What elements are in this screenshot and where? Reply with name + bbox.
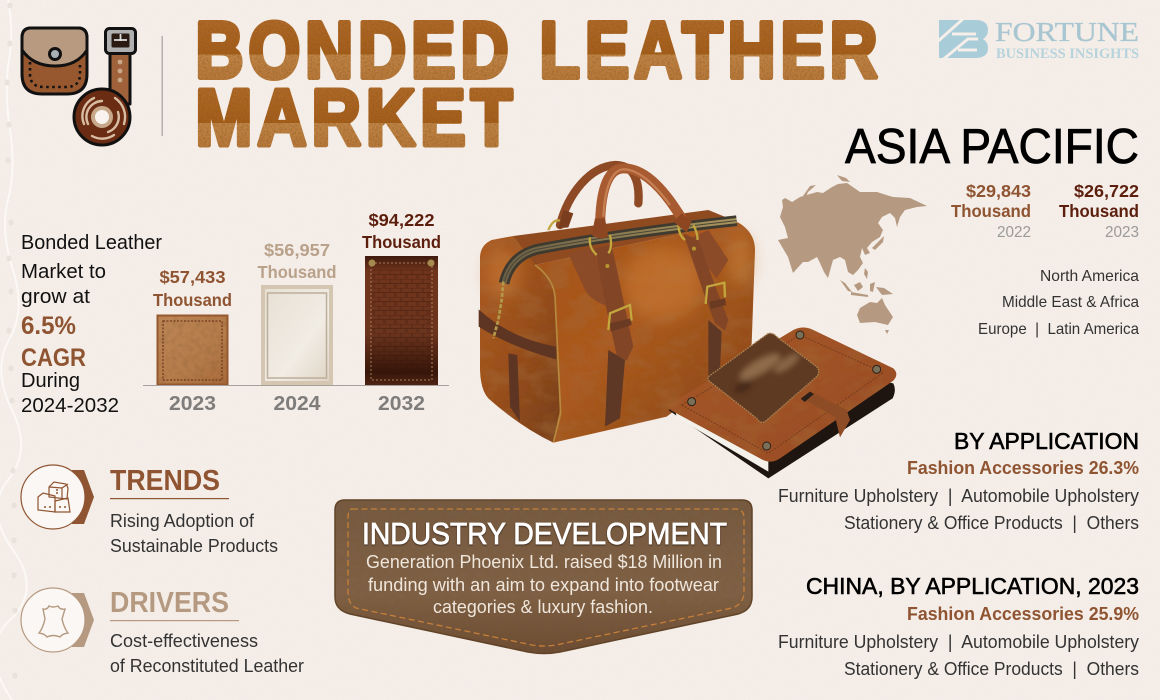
bag straps (595, 233, 728, 427)
text: development body: Generation Phoenix Ltd. raised $18 Million in (366, 551, 722, 572)
title: LEATHER (540, 6, 882, 94)
notebook stitching (682, 335, 883, 453)
bag highlights (487, 233, 752, 320)
panel: by application: Furniture Upholstery | Automobile Upholstery (778, 486, 1139, 506)
bar 2024: 2024 (274, 393, 321, 415)
heading: industry development: INDUSTRY DEVELOPMENT (362, 516, 727, 551)
bag top panel (503, 210, 737, 278)
bag buckles and rivets (548, 220, 725, 330)
panel: China by application: Fashion Accessories 25.9% (907, 604, 1139, 624)
notebook strap (801, 392, 850, 437)
divider (162, 36, 163, 136)
text: drivers description (110, 631, 304, 676)
bag back handle (560, 165, 639, 225)
stat: 2023 value: Thousand (1059, 201, 1139, 221)
text block: CAGR: CAGR (21, 344, 86, 372)
logo wordmark: FORTUNE (995, 17, 1139, 47)
bar 2023: Thousand (153, 290, 232, 310)
stat: 2022 value: $29,843 (966, 181, 1031, 201)
bag side face (480, 236, 560, 443)
leather badge (335, 500, 752, 654)
bar chart (143, 210, 449, 415)
notebook back cover (668, 367, 895, 478)
bar 2023: $57,433 (160, 267, 226, 287)
bag front handle (558, 168, 692, 238)
panel: China by application: Stationery & Office Products | Others (844, 659, 1139, 679)
panel: industry development (335, 500, 752, 654)
bag zipper (504, 221, 737, 283)
illustration: notebook (668, 327, 896, 478)
panel: China by application: Furniture Upholstery | Automobile Upholstery (778, 632, 1139, 652)
bar 2024: $56,957 (264, 240, 330, 260)
text block: CAGR: During (21, 370, 80, 392)
panel: China by application (778, 573, 1139, 679)
bar 2024: Thousand (258, 262, 336, 282)
text block: CAGR: Bonded Leather (21, 232, 162, 254)
bag front face (535, 222, 755, 443)
bar 2032 (362, 210, 441, 415)
text: trends description (110, 511, 278, 556)
stat: 2022 value (951, 181, 1031, 241)
list: other regions: North America (1040, 268, 1139, 285)
title: BONDED (196, 6, 514, 94)
panel: trends (21, 465, 278, 556)
stat: 2022 value: Thousand (951, 201, 1031, 221)
notebook rivets (688, 331, 881, 450)
logo wordmark (995, 17, 1139, 62)
title (196, 6, 882, 162)
stat: 2022 value: 2022 (997, 224, 1031, 241)
list: other regions (978, 268, 1139, 338)
map: Asia Pacific (778, 175, 927, 334)
panel: by application: Stationery & Office Products | Others (844, 513, 1139, 533)
icon: rolled belt (74, 89, 130, 145)
stat: 2023 value (1059, 181, 1139, 241)
title: MARKET (196, 73, 518, 162)
text block: CAGR: 2024-2032 (21, 395, 119, 417)
text: drivers description: Cost-effectiveness (110, 631, 258, 651)
heading: drivers: DRIVERS (110, 587, 229, 619)
illustration: leather bag (479, 165, 755, 443)
bar 2032: Thousand (362, 232, 441, 252)
panel: China by application: CHINA, BY APPLICATION, 2023 (806, 573, 1139, 599)
heading: Asia Pacific: ASIA PACIFIC (845, 119, 1139, 174)
text: development body (366, 551, 722, 617)
bag side belt (479, 309, 556, 422)
icon: purse and belt (22, 28, 136, 145)
notebook front cover (668, 327, 896, 462)
bag chain (493, 282, 503, 338)
stat: 2023 value: 2023 (1105, 224, 1139, 241)
panel: by application: BY APPLICATION (954, 428, 1139, 454)
bag flaps (568, 230, 728, 307)
text: trends description: Rising Adoption of (110, 511, 255, 531)
badge stitching (348, 509, 744, 646)
bar 2032: 2032 (378, 393, 425, 415)
stat: 2023 value: $26,722 (1074, 181, 1139, 201)
text block: CAGR: 6.5% (21, 312, 76, 340)
icon: belt strap (110, 48, 130, 104)
bag piping (535, 265, 561, 443)
bar 2023: 2023 (169, 393, 216, 415)
icon: FB mark (936, 19, 988, 62)
logo: Fortune Business Insights (936, 17, 1139, 62)
list: other regions: Middle East & Africa (1002, 294, 1139, 311)
heading: trends: TRENDS (110, 465, 220, 497)
icon: purse (22, 28, 87, 94)
text block: CAGR: Market to (21, 261, 106, 283)
bar 2032: $94,222 (368, 210, 435, 230)
bar 2023 (153, 267, 232, 415)
text: trends description: Sustainable Products (110, 536, 278, 556)
text: development body: funding with an aim to expand into footwear (368, 574, 719, 595)
notebook pages (675, 408, 768, 472)
text block: CAGR (21, 232, 162, 417)
panel: by application (778, 428, 1139, 533)
panel: by application: Fashion Accessories 26.3% (907, 458, 1139, 478)
text block: CAGR: grow at (21, 286, 90, 308)
list: other regions: Europe | Latin America (978, 321, 1139, 338)
text: development body: categories & luxury fashion. (433, 596, 653, 617)
icon: leather hide (21, 588, 94, 652)
icon: trends boxes (21, 465, 94, 529)
bar 2024 (258, 240, 336, 415)
logo wordmark: BUSINESS INSIGHTS (996, 46, 1139, 62)
illustration: wallet (708, 333, 819, 422)
text: drivers description: of Reconstituted Leather (110, 656, 304, 676)
icon: belt buckle (106, 28, 136, 54)
panel: drivers (21, 587, 304, 676)
